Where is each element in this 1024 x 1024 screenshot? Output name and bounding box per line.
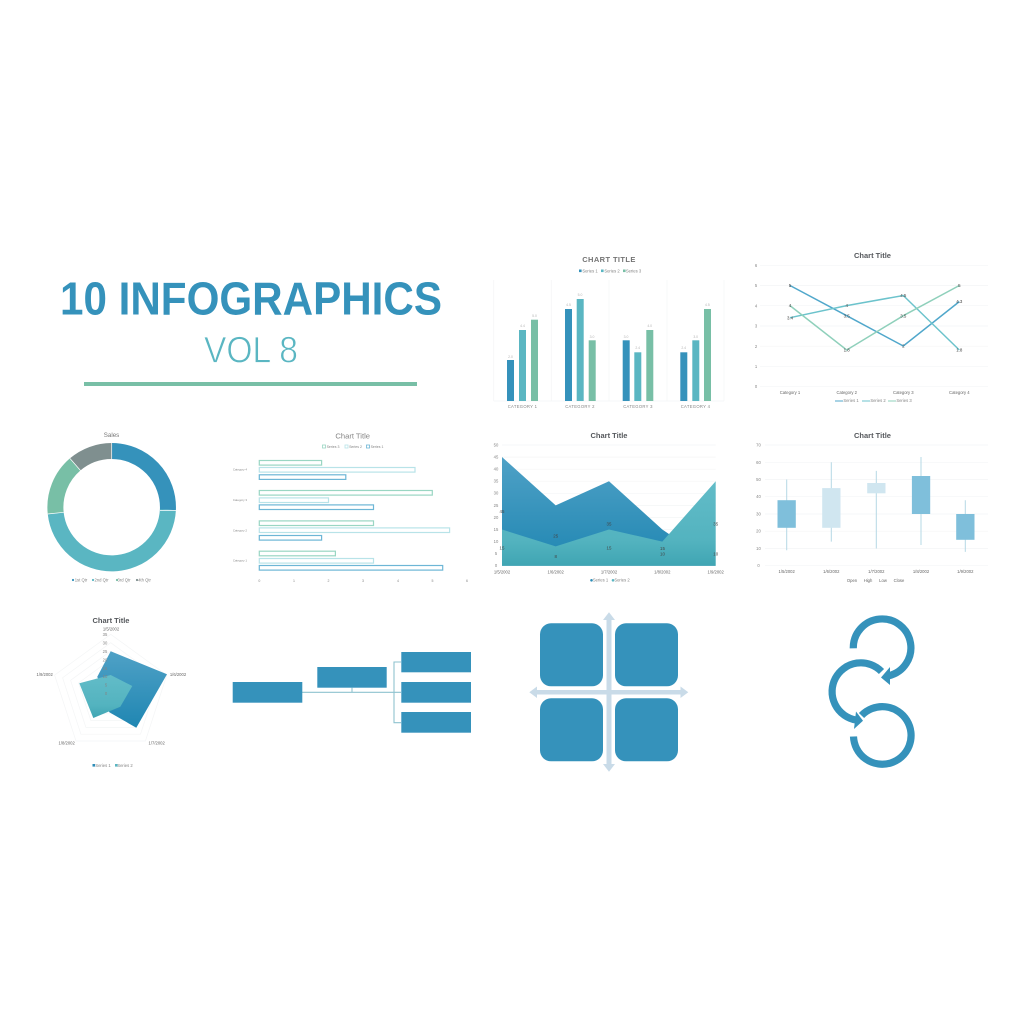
data labels: 15	[500, 546, 505, 551]
value labels: 2.0	[508, 355, 513, 359]
axis scale labels: 30	[103, 640, 108, 646]
date labels	[37, 626, 187, 746]
arrow: horizontal axis	[529, 686, 688, 698]
axis scale labels: 25	[103, 649, 108, 654]
value labels: 4.5	[566, 303, 571, 307]
data labels: 15	[660, 546, 665, 551]
y axis labels	[755, 263, 758, 389]
legend	[590, 578, 630, 583]
y axis labels: 0	[757, 563, 760, 568]
y axis labels: 0	[755, 384, 758, 389]
category labels: Category 4	[233, 468, 247, 472]
value labels: 5.0	[532, 314, 537, 318]
date labels: 1/8/2002	[654, 570, 671, 574]
data labels: 4	[789, 303, 792, 308]
chart heading: Chart Title	[854, 431, 891, 440]
legend: Series 1	[371, 445, 383, 449]
box: root	[233, 682, 302, 703]
category labels: Category 2	[836, 390, 858, 395]
legend	[847, 578, 905, 583]
y axis labels: 20	[494, 515, 499, 520]
legend: 4th Qtr	[138, 578, 151, 582]
category labels: Category 3	[893, 390, 914, 395]
legend: Open	[847, 578, 858, 583]
y axis labels: 30	[756, 512, 761, 516]
data labels: 25	[553, 534, 559, 538]
date labels	[779, 569, 974, 574]
data labels: 5	[789, 283, 792, 288]
data labels: 3.4	[787, 315, 794, 320]
data labels: 35	[713, 522, 719, 526]
y axis labels: 4	[755, 303, 758, 308]
panel: horizontal bar chart	[233, 432, 468, 583]
axis scale labels: 15	[103, 666, 108, 671]
date labels: 1/9/2002	[708, 570, 725, 574]
date labels: 1/7/2002	[601, 570, 618, 574]
chart heading: Chart Title	[335, 432, 370, 440]
legend	[579, 268, 642, 273]
date labels	[494, 570, 725, 574]
y axis labels: 40	[756, 494, 761, 499]
arrow: top loop	[853, 619, 911, 685]
panel: area chart	[494, 431, 725, 583]
x axis labels: 0	[258, 579, 260, 583]
y axis labels: 25	[494, 503, 499, 508]
y axis labels: 45	[494, 454, 499, 460]
date labels: 1/6/2002	[823, 569, 840, 574]
legend: Series 1	[582, 268, 598, 273]
y axis labels: 70	[756, 442, 761, 448]
legend: Series 3	[327, 445, 339, 449]
y axis labels: 15	[494, 527, 499, 532]
x axis labels: 2	[328, 579, 330, 583]
panel: radar chart	[37, 616, 187, 768]
y axis labels: 10	[756, 546, 761, 551]
x axis labels: 4	[397, 579, 399, 583]
category labels: Category 1	[233, 559, 247, 563]
legend	[835, 398, 912, 403]
box: middle	[317, 667, 387, 688]
date labels: 1/5/2002	[779, 569, 796, 574]
area: series 1	[502, 457, 716, 566]
category labels: CATEGORY 1	[508, 404, 538, 409]
data labels: 4	[845, 303, 848, 308]
legend: 3rd Qtr	[117, 578, 131, 582]
legend: Series 2	[117, 763, 133, 768]
date labels: 1/7/2002	[149, 740, 166, 746]
chart heading: Chart Title	[93, 616, 129, 625]
data labels: 45	[500, 509, 505, 514]
x axis labels: 3	[362, 579, 364, 583]
outlined bars	[259, 460, 450, 570]
category labels	[233, 468, 247, 563]
category labels: Category 3	[233, 498, 247, 502]
data labels	[787, 283, 963, 353]
legend: 1st Qtr	[75, 578, 88, 582]
data labels: 2	[902, 344, 905, 348]
title: 10 INFOGRAPHICS	[60, 272, 442, 324]
date labels: 1/6/2002	[170, 672, 187, 677]
chart heading: Chart Title	[591, 431, 627, 440]
y axis labels: 10	[494, 539, 499, 544]
area: series 1	[97, 651, 167, 728]
legend: 2nd Qtr	[95, 578, 109, 582]
y axis labels: 50	[756, 477, 761, 482]
subtitle: VOL 8	[204, 330, 298, 371]
y axis labels	[494, 442, 499, 568]
category labels: CATEGORY 3	[623, 404, 653, 409]
axis scale labels: 10	[103, 674, 108, 679]
y axis labels: 60	[756, 460, 761, 465]
y axis labels: 30	[494, 491, 499, 496]
y axis labels: 1	[755, 364, 758, 369]
legend: Series 1	[95, 763, 111, 768]
quadrant top left	[540, 623, 603, 686]
data labels: 1.8	[844, 348, 850, 353]
value labels: 3.0	[693, 335, 698, 339]
value labels: 4.5	[705, 303, 710, 307]
value labels: 2.4	[681, 346, 686, 350]
category labels: Category 4	[949, 390, 970, 395]
value labels: 3.0	[590, 335, 594, 339]
legend	[322, 445, 383, 449]
date labels: 1/9/2002	[957, 569, 974, 574]
y axis labels: 3	[755, 324, 758, 328]
area: series 2	[502, 481, 716, 566]
axis scale labels: 5	[105, 682, 108, 688]
legend: Series 3	[626, 268, 642, 273]
category labels: CATEGORY 2	[565, 404, 595, 409]
legend: Series 1	[593, 578, 609, 583]
y axis labels: 50	[494, 442, 499, 448]
chart heading: Chart Title	[854, 251, 891, 260]
axis scale labels: 20	[103, 658, 108, 662]
data labels: 15	[607, 546, 612, 551]
legend: High	[864, 578, 873, 583]
area: series 2	[79, 675, 132, 718]
date labels: 1/7/2002	[868, 569, 885, 574]
date labels: 1/5/2002	[103, 626, 120, 632]
y axis labels: 5	[495, 551, 498, 556]
value labels: 2.4	[635, 346, 640, 350]
x axis labels: 1	[293, 579, 295, 583]
axis scale labels: 35	[103, 632, 108, 637]
x axis labels: 5	[432, 579, 434, 583]
category labels: Category 1	[780, 390, 801, 395]
data labels: 10	[660, 552, 665, 556]
panel: quadrant matrix	[529, 612, 688, 772]
legend: Series 3	[896, 398, 912, 403]
box: branch 1	[401, 652, 471, 672]
chart heading: Sales	[104, 432, 119, 439]
connector lines	[302, 662, 401, 723]
y axis labels: 2	[755, 344, 758, 349]
arrow: vertical axis	[603, 612, 615, 772]
value labels: 4.0	[647, 324, 652, 328]
x axis labels	[258, 579, 468, 583]
category labels: Category 2	[233, 528, 247, 532]
category labels	[780, 390, 970, 395]
y axis labels: 5	[755, 283, 758, 288]
series lines	[790, 286, 959, 350]
data labels: 3.5	[900, 313, 907, 318]
data labels: 35	[607, 522, 612, 526]
legend: Series 1	[843, 398, 859, 403]
legend: Low	[879, 578, 888, 583]
data labels: 4.5	[900, 293, 907, 298]
data labels: 8	[554, 554, 557, 559]
data labels	[500, 509, 719, 559]
quadrant bottom right	[615, 698, 678, 761]
quadrant top right	[615, 623, 678, 686]
legend	[92, 763, 133, 768]
value labels: 5.0	[578, 293, 582, 297]
x axis labels: 6	[466, 579, 468, 583]
panel: circular arrows	[832, 619, 911, 764]
data labels: 4.3	[956, 299, 963, 304]
panel: clustered column chart	[494, 255, 724, 409]
value labels: 3.0	[624, 335, 628, 339]
value labels: 4.4	[520, 324, 525, 328]
box: branch 3	[401, 712, 471, 733]
data labels: 10	[713, 552, 719, 556]
panel: donut chart	[48, 432, 176, 582]
legend	[72, 578, 151, 582]
category labels	[508, 404, 711, 409]
legend: Series 2	[604, 268, 620, 273]
date labels: 1/8/2002	[913, 569, 930, 574]
panel: hierarchy process diagram	[233, 652, 471, 733]
legend: Series 2	[349, 445, 362, 449]
data labels: 5	[958, 283, 961, 288]
y axis labels: 35	[494, 479, 499, 484]
category labels: CATEGORY 4	[681, 404, 711, 409]
data labels: 1.8	[956, 348, 963, 353]
legend: Close	[894, 578, 905, 583]
chart heading: CHART TITLE	[582, 255, 636, 264]
date labels: 1/9/2002	[37, 672, 54, 677]
legend: Series 2	[614, 578, 630, 583]
y axis labels: 6	[755, 263, 758, 268]
date labels: 1/5/2002	[494, 570, 511, 574]
title block	[60, 272, 442, 386]
value labels	[508, 293, 710, 359]
data labels: 3.5	[844, 313, 850, 318]
axis scale labels: 0	[105, 691, 108, 696]
arrow: bottom loop	[854, 707, 911, 764]
title rule	[84, 382, 417, 386]
date labels: 1/8/2002	[59, 740, 76, 746]
date labels: 1/6/2002	[548, 570, 565, 574]
legend: Series 2	[870, 398, 886, 403]
donut ring	[48, 443, 176, 563]
y axis labels: 40	[494, 467, 499, 472]
bars	[507, 299, 711, 401]
panel: candlestick chart	[756, 431, 988, 583]
y axis labels	[756, 442, 761, 568]
y axis labels: 0	[495, 563, 498, 568]
panel: line chart	[755, 251, 988, 403]
candles	[778, 457, 974, 552]
axis scale labels	[103, 632, 108, 696]
quadrant bottom left	[540, 698, 603, 761]
y axis labels: 20	[756, 529, 761, 534]
box: branch 2	[401, 682, 471, 703]
arrow: middle loop	[832, 663, 882, 729]
